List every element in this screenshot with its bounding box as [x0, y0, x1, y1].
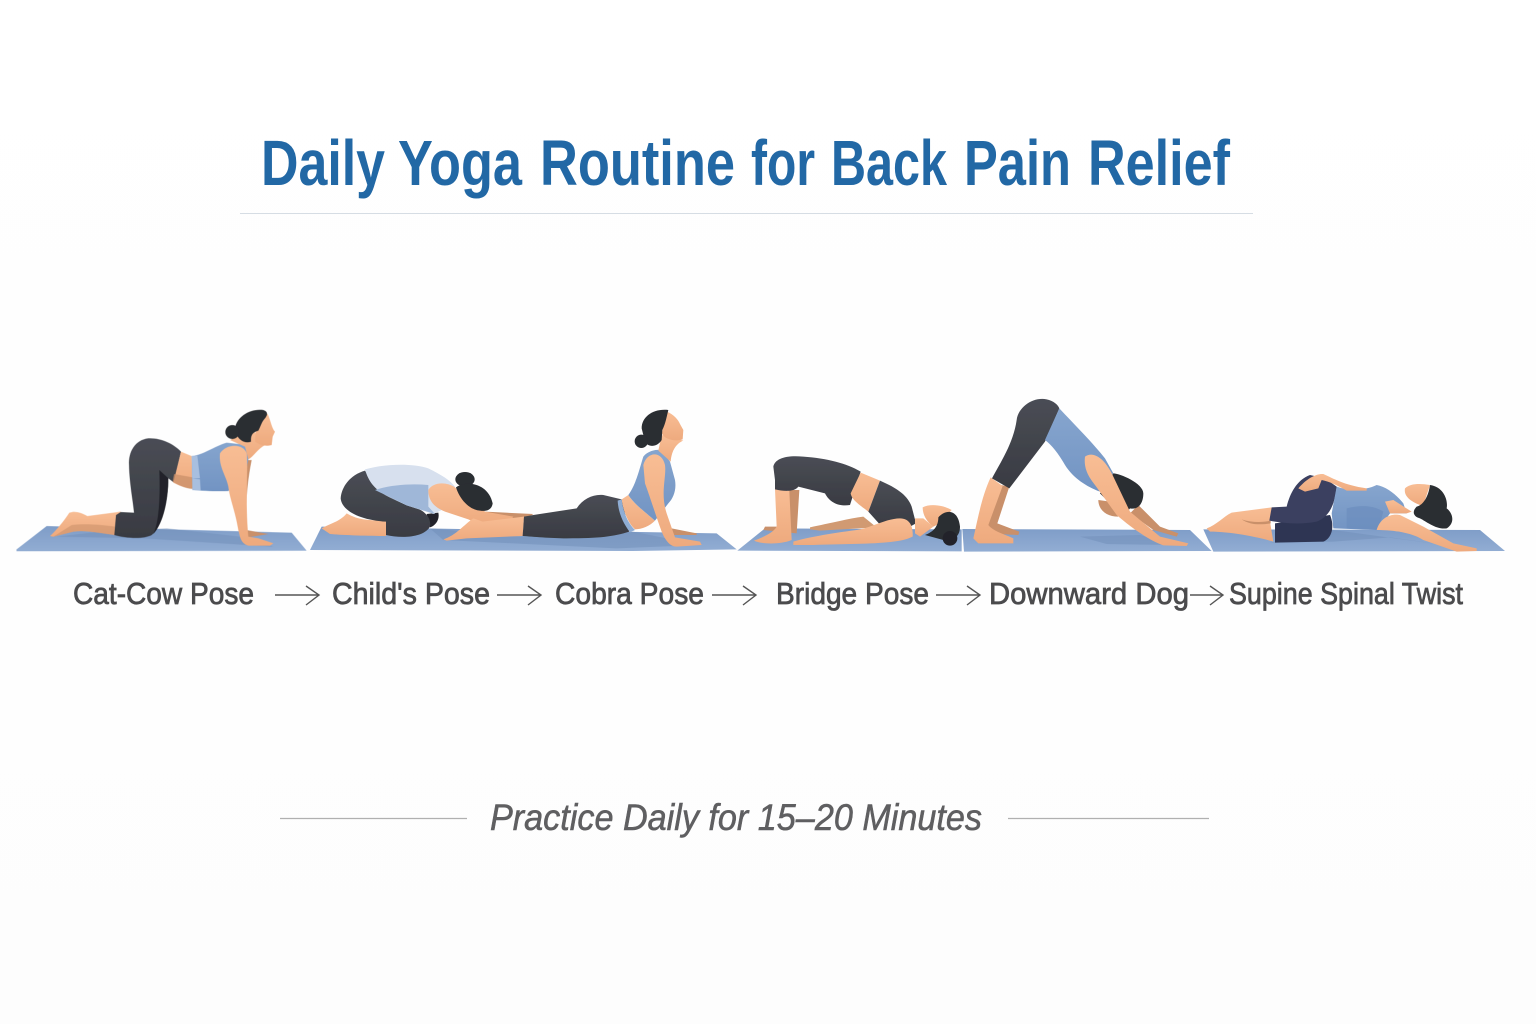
arrow [497, 586, 541, 605]
figure: bridge pose and downward dog [737, 399, 1212, 552]
mat: child's and cobra [310, 527, 737, 551]
title [261, 127, 1231, 199]
arrow [712, 586, 756, 605]
title: Pain [964, 127, 1071, 199]
mat: downward dog [962, 529, 1212, 552]
label: cat-cow pose: Cat-Cow Pose [73, 576, 254, 611]
title: for [751, 127, 815, 199]
label: child's pose: Child's Pose [332, 576, 490, 611]
arrow [936, 586, 980, 605]
title: Daily [261, 127, 385, 199]
figure: supine spinal twist [1203, 474, 1505, 552]
arrow [1190, 586, 1223, 605]
title: Routine [540, 127, 735, 199]
arrow [275, 586, 319, 605]
title: Back [831, 127, 947, 199]
title: Yoga [398, 127, 522, 199]
figure: cat-cow pose [17, 410, 307, 551]
label: supine spinal twist: Supine Spinal Twist [1229, 576, 1463, 611]
label: cobra pose: Cobra Pose [555, 576, 704, 611]
figure: child's pose and cobra pose [310, 410, 737, 551]
tagline: Practice Daily for 15–20 Minutes [490, 797, 982, 838]
mat: bridge [737, 528, 962, 551]
label: bridge pose: Bridge Pose [776, 576, 929, 611]
mat: supine twist [1203, 529, 1505, 552]
mat: cat-cow [17, 526, 307, 551]
title: Relief [1088, 127, 1231, 199]
pose labels and arrows [73, 576, 1463, 611]
label: downward dog: Downward Dog [989, 576, 1189, 611]
